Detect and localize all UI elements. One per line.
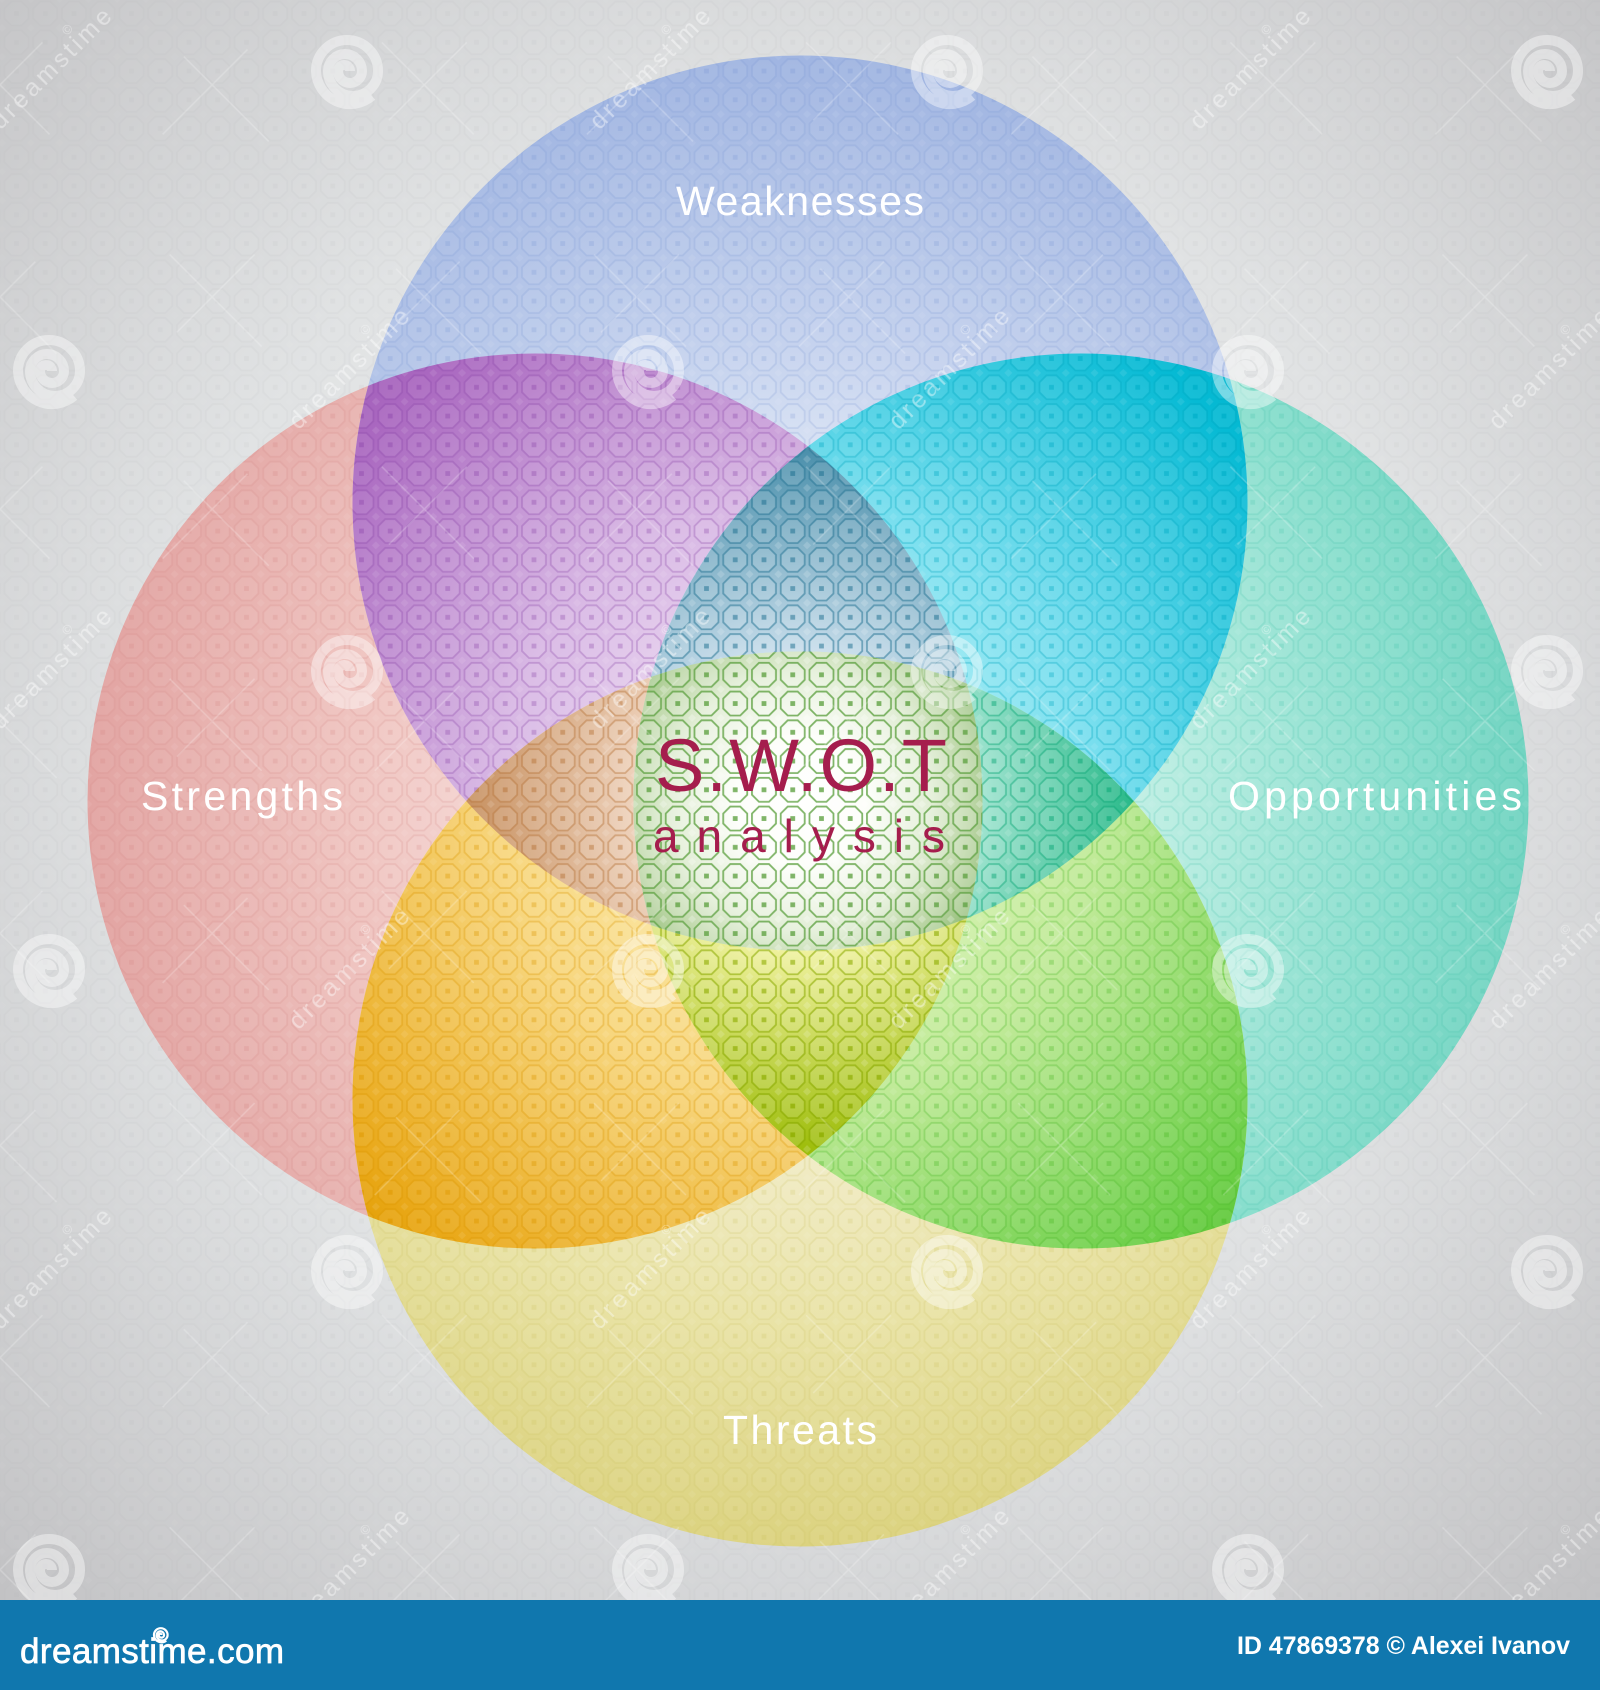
label: Threats: Threats <box>723 1407 877 1453</box>
panel: threats circle <box>352 802 1248 1546</box>
overlap: top triple region <box>651 446 967 684</box>
watermark: dreamstime text: dreamstime <box>283 1500 418 1635</box>
watermark: dreamstime text: dreamstime <box>883 900 1018 1035</box>
watermark: dreamstime text: © <box>58 21 76 38</box>
watermark: dreamstime text: © <box>1257 621 1275 638</box>
watermark: dreamstime text: © <box>356 321 374 338</box>
watermark: dreamstime text: © <box>657 1221 675 1238</box>
label: Strengths: Strengths <box>141 773 343 819</box>
panel: strengths circle <box>88 386 466 1216</box>
overlap: left triple region <box>466 652 949 950</box>
watermark: dreamstime text: dreamstime <box>584 0 719 135</box>
watermark: dreamstime text: © <box>1556 1521 1574 1538</box>
watermark: dreamstime text: dreamstime <box>1184 0 1319 135</box>
label: Weaknesses: Weaknesses <box>676 178 924 224</box>
overlap: weaknesses and strengths (purple) <box>352 354 808 801</box>
centre title: S.W.O.T: S.W.O.T <box>655 724 947 807</box>
watermark: dreamstime text: © <box>1556 321 1574 338</box>
overlap: weaknesses and opportunities (cyan) <box>651 354 1248 801</box>
label: Opportunities: Opportunities <box>1228 773 1522 819</box>
watermark: dreamstime text: dreamstime <box>584 1200 719 1335</box>
panel: weaknesses circle <box>352 56 1248 799</box>
footer credit: ID 47869378 © Alexei Ivanov <box>1237 1632 1570 1660</box>
watermark: dreamstime text: © <box>657 21 675 38</box>
overlap: right triple region <box>634 652 1134 950</box>
watermark: dreamstime text: dreamstime <box>883 300 1018 435</box>
footer bar <box>0 1600 1600 1690</box>
watermark: dreamstime text: dreamstime <box>584 600 719 735</box>
watermark: dreamstime text: © <box>956 921 974 938</box>
watermark: dreamstime text: © <box>356 1521 374 1538</box>
watermark: dreamstime text: © <box>1257 21 1275 38</box>
panel: opportunities circle <box>1134 379 1528 1223</box>
watermark: dreamstime text: dreamstime <box>1184 600 1319 735</box>
watermark: dreamstime text: © <box>956 321 974 338</box>
watermark: dreamstime text: © <box>657 621 675 638</box>
watermark: dreamstime text: dreamstime <box>283 300 418 435</box>
watermark: dreamstime text: © <box>58 1221 76 1238</box>
overlap: threats and opportunities (green) <box>652 684 1248 1248</box>
watermark: dreamstime text: dreamstime <box>883 1500 1018 1635</box>
overlap: threats and strengths (orange) <box>352 677 808 1248</box>
centre subtitle: analysis: analysis <box>653 810 945 862</box>
watermark: dreamstime text: dreamstime <box>1184 1200 1319 1335</box>
overlap: centre region <box>634 652 982 950</box>
watermark: dreamstime text: © <box>1257 1221 1275 1238</box>
watermark: dreamstime text: © <box>1556 921 1574 938</box>
watermark: dreamstime text: dreamstime <box>283 900 418 1035</box>
watermark: dreamstime text: © <box>956 1521 974 1538</box>
watermark: dreamstime text: © <box>58 621 76 638</box>
footer logo: dreamstime.com: dreamstime.com <box>20 1632 284 1671</box>
watermark: dreamstime text: © <box>356 921 374 938</box>
overlap: bottom triple region <box>651 652 967 1156</box>
